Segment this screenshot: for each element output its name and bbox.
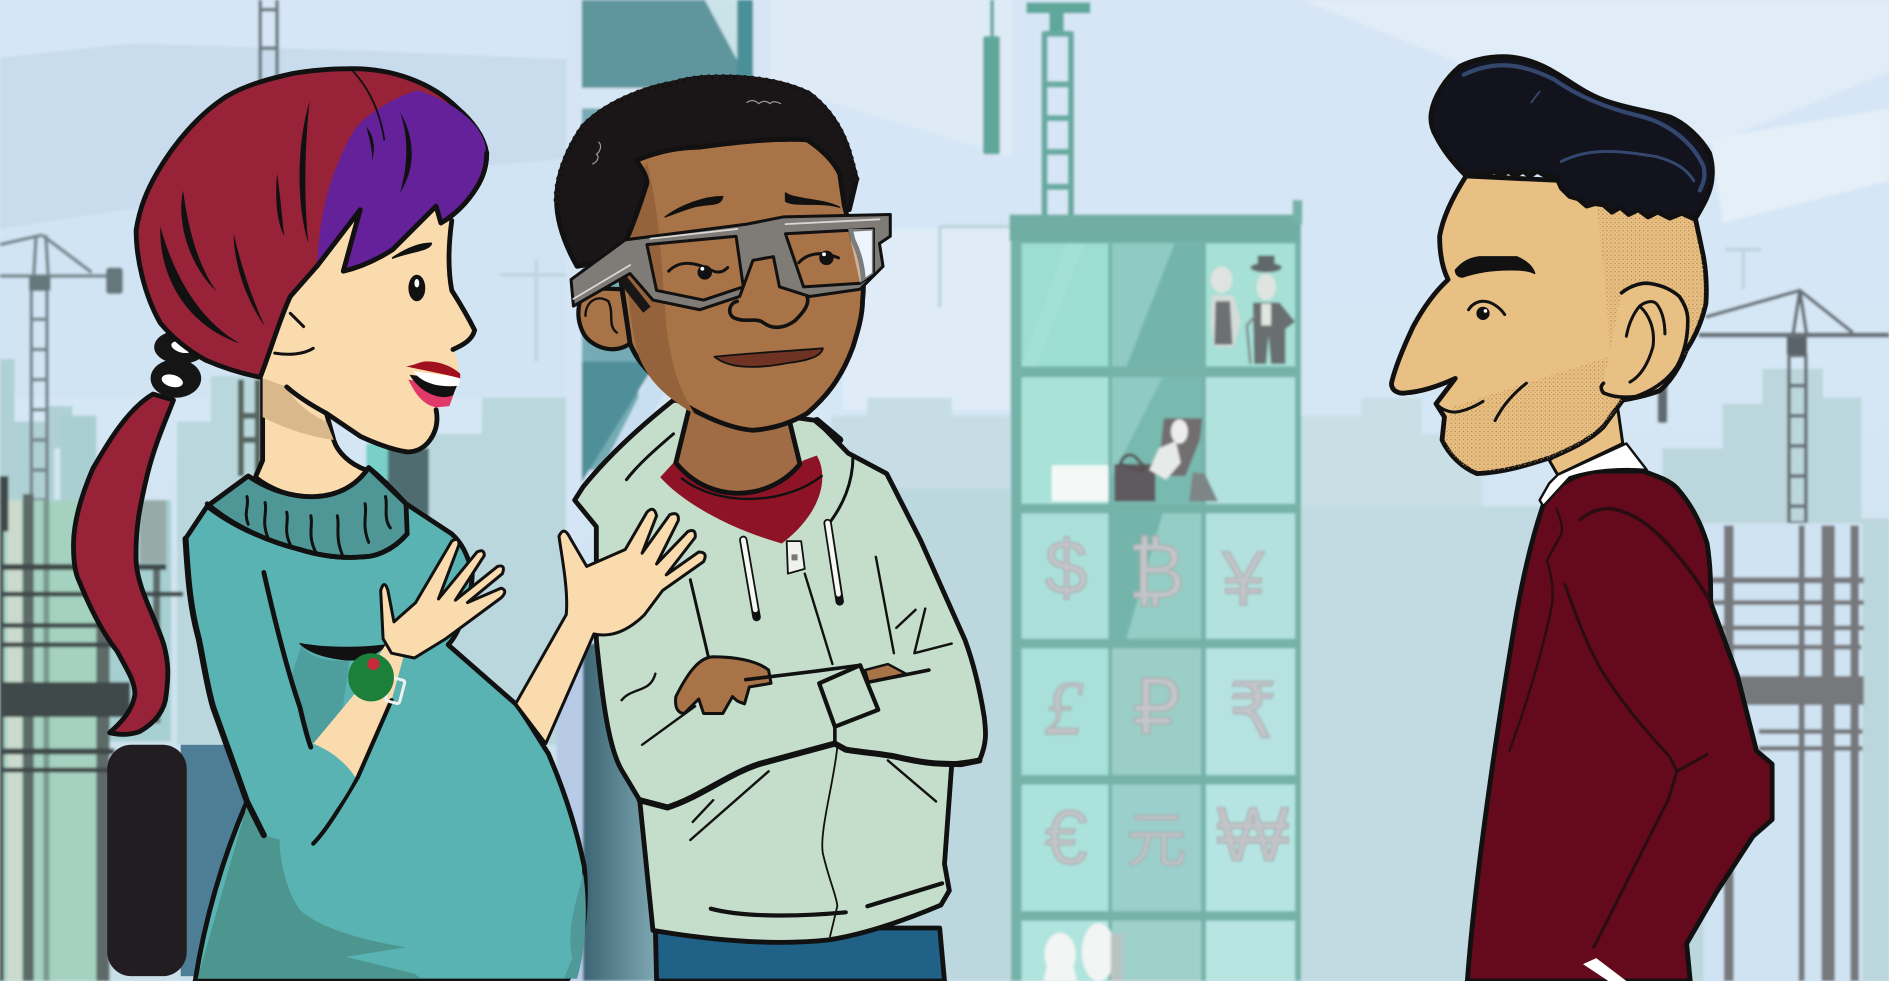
mouth and smile crease	[1436, 383, 1526, 421]
head back outline	[1687, 219, 1707, 349]
knit collar	[207, 468, 407, 557]
hair	[136, 69, 487, 377]
jeans	[655, 928, 944, 981]
hoodie	[575, 400, 986, 942]
mouth	[406, 361, 460, 407]
dress body	[186, 468, 585, 981]
neck	[1549, 410, 1623, 475]
mouth	[714, 348, 823, 367]
hair highlights	[1464, 65, 1704, 190]
chair	[107, 745, 253, 976]
currency symbols: £	[1044, 665, 1083, 751]
currency symbols	[1044, 525, 1290, 881]
face	[260, 206, 475, 452]
eyes	[669, 263, 728, 272]
centre crane on building	[983, 0, 1090, 215]
window vignette: people at bottom	[1043, 923, 1123, 981]
chest crease	[300, 644, 387, 660]
nose	[730, 296, 808, 327]
neck	[255, 374, 387, 500]
currency symbols: ₿	[1128, 529, 1185, 615]
ear	[1601, 283, 1688, 397]
zipper	[787, 541, 805, 574]
bracelet	[348, 653, 405, 704]
currency symbols: ₹	[1228, 669, 1277, 755]
second hand and forearm	[516, 509, 705, 744]
central building with currency windows	[1010, 200, 1302, 981]
eyebrows	[665, 196, 723, 217]
folded arm hand	[676, 657, 771, 713]
stipple shading	[1444, 202, 1707, 471]
hood lines	[626, 434, 853, 657]
distant cranes	[500, 227, 1761, 362]
window vignette: couple	[1211, 255, 1295, 364]
eye	[408, 275, 425, 301]
window vignette: desk and chair	[1052, 418, 1218, 501]
shirt cuff	[1583, 958, 1626, 981]
left crane and scaffolding	[0, 0, 429, 981]
character: man with glasses	[557, 77, 986, 981]
head	[620, 139, 863, 430]
right crane and scaffolding	[1658, 290, 1889, 981]
purple fringe	[317, 90, 486, 271]
sleeve	[186, 539, 355, 844]
city skyline	[0, 359, 1889, 981]
arm lines	[746, 665, 929, 682]
glass tower behind the characters	[557, 0, 753, 981]
front seam and pockets	[622, 557, 952, 936]
neck	[676, 404, 800, 493]
currency symbols: 元	[1126, 807, 1187, 875]
currency symbols: $	[1045, 525, 1088, 611]
ear	[578, 288, 630, 349]
hair tie	[151, 330, 207, 398]
eyebrow	[1455, 257, 1535, 277]
currency symbols: ₩	[1217, 791, 1290, 877]
forearm	[313, 645, 404, 777]
hair	[557, 77, 857, 266]
hoodie strings	[743, 523, 840, 617]
character: man in maroon jacket	[1391, 57, 1772, 981]
window reflections	[1022, 243, 1201, 639]
currency symbols: ¥	[1221, 536, 1265, 622]
shirt collar	[1540, 443, 1647, 506]
character: pregnant woman	[73, 69, 705, 981]
ponytail	[73, 394, 173, 734]
window grid	[1022, 243, 1295, 981]
currency symbols: €	[1045, 795, 1088, 881]
red collar	[660, 456, 822, 544]
head	[1391, 176, 1706, 474]
glasses	[571, 215, 890, 310]
currency symbols: ₽	[1132, 665, 1181, 751]
sideburn	[619, 275, 647, 310]
hair strands	[160, 101, 412, 343]
hair pompadour	[1431, 57, 1712, 219]
jacket	[1467, 471, 1772, 981]
raised hand	[381, 539, 505, 658]
dress shading	[198, 646, 586, 979]
eye	[1469, 301, 1505, 315]
